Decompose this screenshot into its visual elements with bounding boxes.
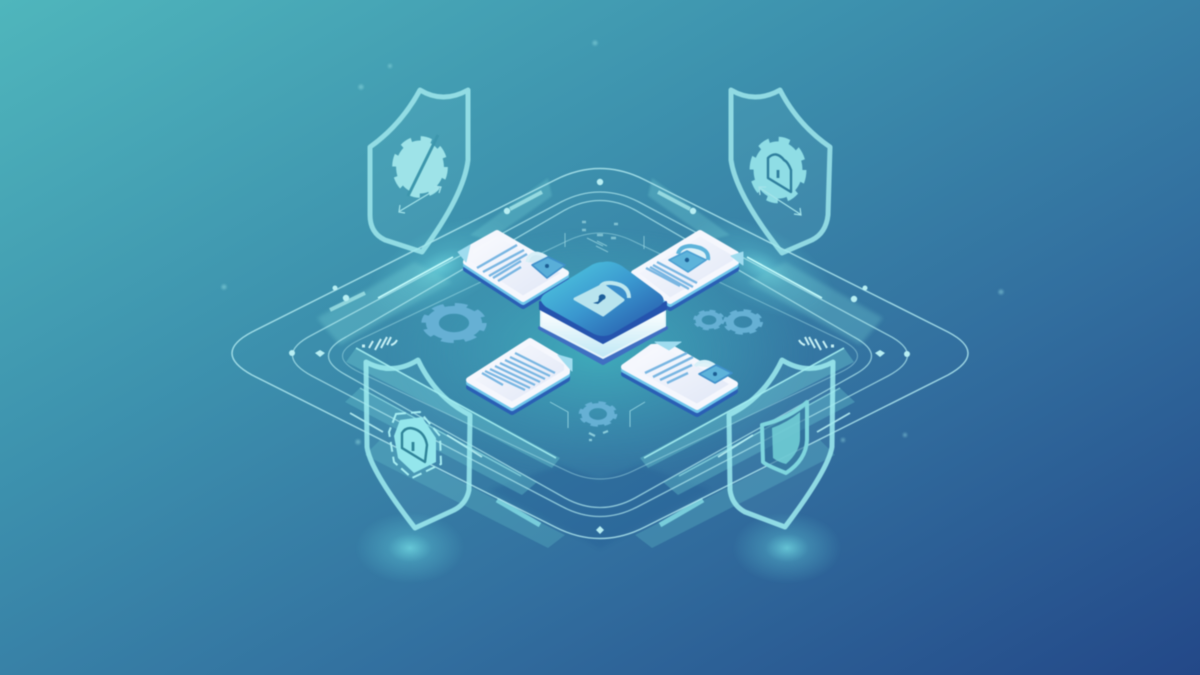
ambient glow: upper right: [673, 195, 851, 341]
ambient glow: platform centre: [385, 227, 815, 477]
shield icon: octagon lock: [389, 412, 441, 478]
ring: inner: [342, 233, 858, 479]
document: bottom right: [624, 342, 735, 414]
platform: band segments: [317, 178, 883, 548]
ring: third: [328, 200, 872, 508]
shield icon: small shield: [762, 402, 807, 473]
document: bottom left: [469, 341, 572, 412]
shield icon: gear with lock: [754, 141, 802, 215]
particles: [222, 40, 1004, 444]
connector end dots: [289, 179, 910, 534]
ring: outer: [232, 168, 968, 538]
shield icon: gear with slash: [396, 135, 444, 213]
block: base shadow: [540, 328, 666, 363]
shield: top left: [370, 90, 468, 252]
ambient glow: upper left: [351, 195, 529, 341]
block: blue edge: [540, 302, 666, 343]
ambient glow: lower left: [355, 512, 465, 584]
lock on document: [669, 246, 708, 272]
circuit glyphs: right: [799, 337, 834, 350]
gear: large left: [426, 306, 482, 340]
ambient glow: lower right: [732, 512, 842, 584]
document: top left: [458, 233, 566, 306]
gear: small right 1: [695, 311, 723, 329]
block: top face: [541, 262, 664, 336]
bands: upper right: [648, 178, 883, 345]
shield: top right: [731, 90, 830, 253]
block: white layer: [541, 310, 665, 358]
ring: second: [292, 192, 908, 516]
gear: bottom: [581, 403, 615, 425]
central block: [540, 262, 666, 363]
shield: bottom right: [729, 360, 833, 527]
block: padlock: [575, 283, 629, 315]
lock on document: [527, 253, 565, 278]
document: top right: [634, 233, 743, 308]
gear: small right 2: [726, 311, 760, 333]
platform: darker lower channel: [490, 465, 710, 548]
bands: lower left: [345, 348, 565, 548]
shield: bottom left: [366, 360, 470, 528]
bands: lower right: [635, 348, 855, 548]
circuit: lower cluster: [550, 402, 645, 440]
circuit: upper cluster: [565, 222, 644, 252]
lock on document: [695, 362, 732, 383]
vertical connector lines: [292, 110, 907, 566]
platform: concentric rings: [232, 168, 968, 538]
bands: upper left: [317, 178, 552, 345]
circuit glyphs: left: [362, 337, 397, 350]
